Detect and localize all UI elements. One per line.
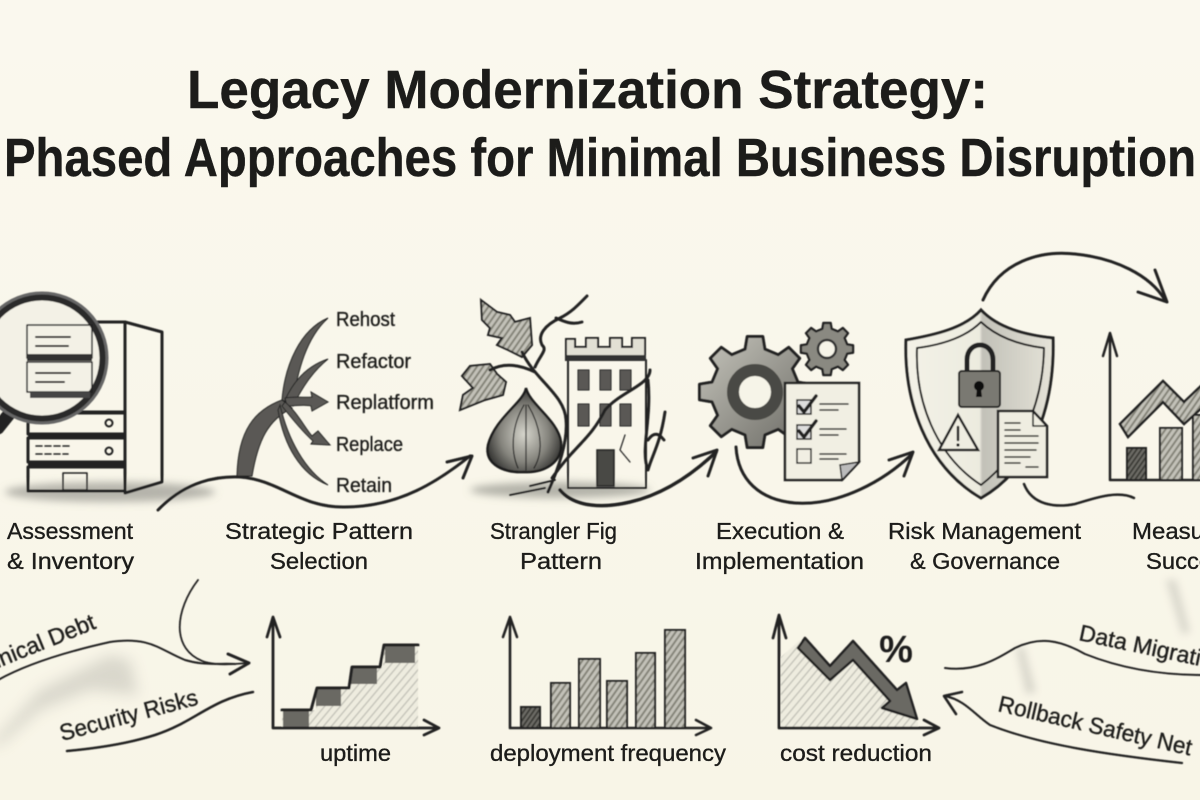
strategy options list: Rehost [336, 309, 395, 331]
checklist [785, 383, 859, 480]
flow curve: data migration [945, 641, 1200, 675]
label: cost reduction: cost reduction [780, 740, 932, 766]
icon: shield with lock, warning and document [906, 310, 1053, 498]
flow arrow: rollback safety net [944, 692, 1182, 763]
icon: gears and checklist [700, 323, 859, 480]
label: risk management and governance [888, 518, 1082, 574]
label: risk management and governance: & Governance [910, 548, 1060, 574]
label: strategic pattern selection: Strategic Pattern [225, 518, 413, 544]
label: execution and implementation [695, 518, 864, 574]
vines [490, 296, 665, 492]
flow arrow: over to success [983, 253, 1167, 302]
label: strategic pattern selection [225, 518, 413, 574]
warning triangle [939, 415, 978, 450]
fig [488, 388, 561, 472]
flow curve: technical debt [0, 641, 235, 680]
large gear [700, 336, 810, 448]
small gear [801, 323, 853, 375]
chart: cost reduction [773, 615, 939, 735]
label: execution and implementation: Implementation [695, 548, 864, 574]
flow curve: security risks [67, 692, 253, 751]
strategy options list: Replace [336, 434, 403, 456]
label: strangler fig pattern [490, 518, 617, 574]
flow arrow: assessment to strangler fig [158, 456, 472, 510]
label: execution and implementation: Execution & [716, 518, 844, 544]
smudge marks [0, 580, 1190, 745]
document [998, 411, 1047, 477]
label: risk management and governance: Risk Management [888, 518, 1082, 544]
label: assessment and inventory [7, 518, 135, 574]
icon: branching pattern arrows [237, 318, 330, 485]
label: rollback safety net: Rollback Safety Net [996, 691, 1195, 761]
label: strangler fig pattern: Strangler Fig [490, 518, 617, 544]
label: security risks: Security Risks [57, 684, 200, 746]
icon: server under magnifying glass [0, 293, 215, 502]
label: measuring success [1132, 518, 1200, 574]
label: deployment frequency: deployment frequency [490, 740, 727, 766]
flow line under shield [1024, 484, 1134, 506]
chart: uptime [267, 617, 439, 735]
strategy options list: Refactor [336, 351, 411, 373]
label: assessment and inventory: & Inventory [7, 548, 135, 574]
strategy options list [336, 309, 434, 497]
flow arrow: execution to risk management [736, 447, 913, 503]
icon: magnifying glass [0, 293, 107, 428]
chart: measuring success [1103, 333, 1200, 480]
strategy options list: Retain [336, 475, 392, 497]
label: strangler fig pattern: Pattern [520, 548, 602, 574]
title [4, 60, 1196, 188]
flow arrow: strangler fig to execution [560, 450, 717, 506]
icon: strangler fig and tower [460, 296, 665, 498]
label: strategic pattern selection: Selection [270, 548, 368, 574]
lock [959, 345, 1000, 407]
title: Legacy Modernization Strategy: [187, 60, 988, 120]
label: uptime: uptime [320, 740, 391, 766]
leaves [481, 300, 532, 357]
strategy options list: Replatform [336, 392, 434, 414]
flow arrow: debt to uptime [180, 580, 249, 674]
chart: deployment frequency [503, 617, 711, 735]
tower [566, 338, 646, 488]
label: assessment and inventory: Assessment [7, 518, 134, 544]
percent sign: % [879, 629, 913, 671]
